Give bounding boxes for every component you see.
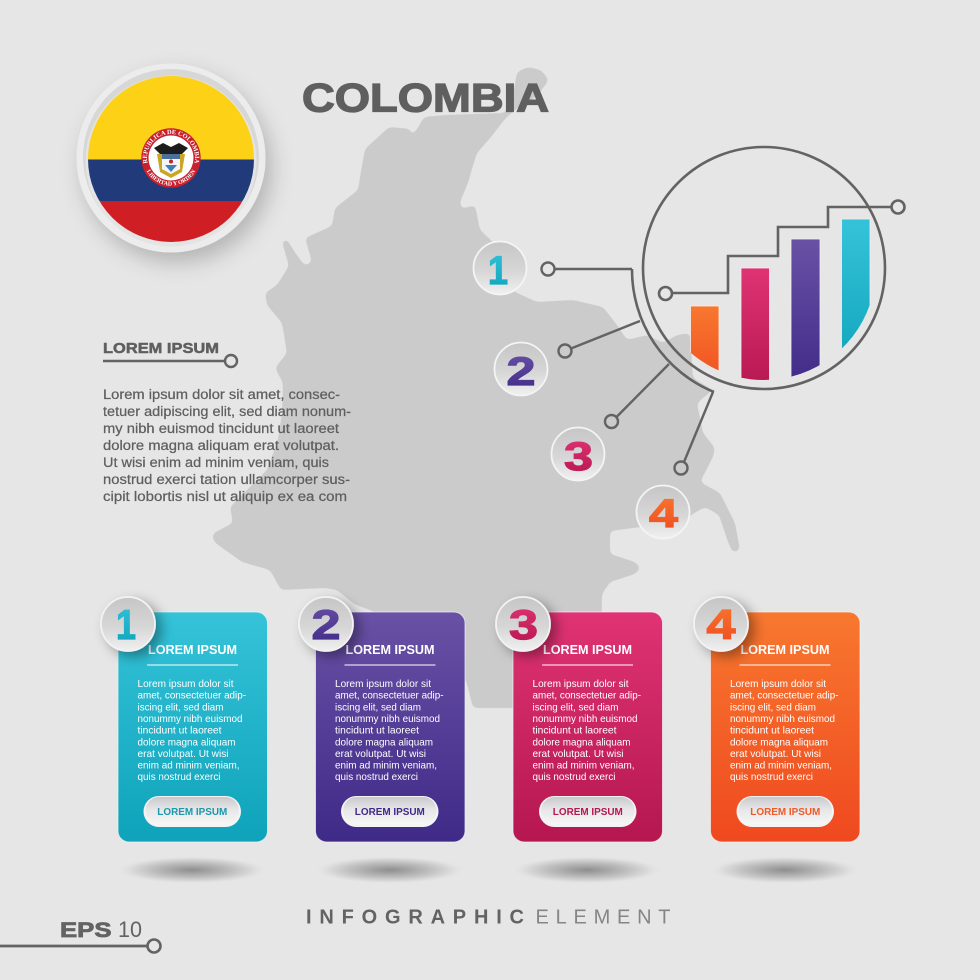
side heading: LOREM IPSUM xyxy=(103,341,219,357)
card 2 body text: dolore magna aliquam xyxy=(335,737,433,748)
card 4 body text: enim ad minim veniam, xyxy=(730,761,832,772)
card 2 body text: iscing elit, sed diam xyxy=(335,702,421,713)
card 4 body text: nonummy nibh euismod xyxy=(730,714,835,725)
card 1 body text: enim ad minim veniam, xyxy=(138,761,240,772)
card 3 body text: dolore magna aliquam xyxy=(532,737,630,748)
card 2 body text: quis nostrud exerci xyxy=(335,772,418,783)
side text block: nostrud exerci tation ullamcorper sus- xyxy=(103,472,350,488)
card 4 body text: tincidunt ut laoreet xyxy=(730,726,814,737)
side text block: tetuer adipiscing elit, sed diam nonum- xyxy=(103,404,351,420)
card 3 button xyxy=(539,796,636,827)
connector 4 xyxy=(674,392,713,474)
map badge 2: 2 xyxy=(506,350,536,394)
panel: card 2: LOREM IPSUM xyxy=(346,642,434,657)
card 1 body text: amet, consectetuer adip- xyxy=(138,691,246,702)
card 3 body text: iscing elit, sed diam xyxy=(532,702,618,713)
footer label: EPS 10 xyxy=(0,917,160,952)
panel: card 4 xyxy=(694,597,860,842)
floor shadow 3 xyxy=(511,856,663,884)
title: COLOMBIA xyxy=(302,76,549,120)
card 2 button xyxy=(341,796,438,827)
side text block xyxy=(103,387,351,505)
coat of arms seal xyxy=(141,128,201,188)
footer label: EPS 10: EPS xyxy=(60,918,112,942)
card 2 body text: erat volutpat. Ut wisi xyxy=(335,749,426,760)
card 3 number badge: 3 xyxy=(509,601,538,648)
side text block: my nibh euismod tincidunt ut laoreet xyxy=(103,421,339,437)
card 4 number badge: 4 xyxy=(706,601,736,648)
card 1 body text: dolore magna aliquam xyxy=(138,737,236,748)
card 3 body text: tincidunt ut laoreet xyxy=(532,726,617,737)
card 1 button: LOREM IPSUM xyxy=(157,807,227,818)
step line xyxy=(671,207,892,293)
side text block: Lorem ipsum dolor sit amet, consec- xyxy=(103,387,340,403)
card 3 body text: erat volutpat. Ut wisi xyxy=(532,749,624,760)
panel: card 3 xyxy=(496,597,662,842)
panel: card 4: LOREM IPSUM xyxy=(740,642,830,657)
map badge 4: 4 xyxy=(649,492,679,536)
flag badge xyxy=(73,64,281,272)
card 3 body text: Lorem ipsum dolor sit xyxy=(532,679,629,690)
card 1 body text: iscing elit, sed diam xyxy=(138,702,224,713)
card 2 number badge xyxy=(299,597,353,651)
panel: card 3: LOREM IPSUM xyxy=(543,642,632,657)
card 1 body text: quis nostrud exerci xyxy=(138,772,220,783)
card 1 body text: erat volutpat. Ut wisi xyxy=(138,749,228,760)
card 4 body text xyxy=(730,679,838,783)
footer label: infographic element: ELEMENT xyxy=(536,906,670,928)
card 2 body text: amet, consectetuer adip- xyxy=(335,691,444,702)
connector 3 xyxy=(605,364,669,428)
side text block: Ut wisi enim ad minim veniam, quis xyxy=(103,455,329,471)
card 3 button: LOREM IPSUM xyxy=(553,807,623,818)
floor shadow 2 xyxy=(314,856,466,884)
map of Colombia xyxy=(212,67,740,708)
card 4 body text: Lorem ipsum dolor sit xyxy=(730,679,826,690)
lens ring xyxy=(643,147,885,389)
floor shadow 1 xyxy=(116,856,268,884)
panel: card 1: LOREM IPSUM xyxy=(148,642,237,657)
map badge 4 xyxy=(636,486,690,538)
map badge 2 xyxy=(494,342,548,396)
card 3 body text xyxy=(532,679,641,783)
card 4 body text: iscing elit, sed diam xyxy=(730,702,816,713)
card 3 number badge xyxy=(496,597,550,651)
card 4 body text: amet, consectetuer adip- xyxy=(730,691,838,702)
card 4 body text: erat volutpat. Ut wisi xyxy=(730,749,821,760)
map badge 3: 3 xyxy=(564,435,593,479)
card 2 button: LOREM IPSUM xyxy=(355,807,425,818)
card 1 number badge: 1 xyxy=(116,601,136,648)
card 1 body text: nonummy nibh euismod xyxy=(138,714,243,725)
outer arc xyxy=(632,269,714,392)
map badge 1 xyxy=(474,242,526,294)
bar chart xyxy=(690,219,870,396)
side text block: dolore magna aliquam erat volutpat. xyxy=(103,438,339,454)
map badge 3 xyxy=(552,428,604,480)
card 2 number badge: 2 xyxy=(312,601,340,648)
card 4 body text: dolore magna aliquam xyxy=(730,737,828,748)
connector 2 xyxy=(558,321,640,358)
side heading xyxy=(103,341,237,367)
card 3 body text: quis nostrud exerci xyxy=(532,772,616,783)
card 2 body text: Lorem ipsum dolor sit xyxy=(335,679,431,690)
footer label: EPS 10: 10 xyxy=(118,917,142,942)
card 1 body text xyxy=(138,679,246,783)
card 4 button: LOREM IPSUM xyxy=(750,807,820,818)
card 2 body text xyxy=(335,679,444,783)
card 1 number badge xyxy=(101,597,155,651)
card 4 body text: quis nostrud exerci xyxy=(730,772,813,783)
card 3 body text: amet, consectetuer adip- xyxy=(532,691,641,702)
card 1 body text: tincidunt ut laoreet xyxy=(138,726,222,737)
footer label: infographic element xyxy=(306,906,670,928)
connector 1 xyxy=(542,262,632,276)
card 2 body text: tincidunt ut laoreet xyxy=(335,726,419,737)
card 4 number badge xyxy=(694,597,748,651)
card 2 body text: enim ad minim veniam, xyxy=(335,761,437,772)
map badge 1: 1 xyxy=(488,249,508,293)
panel: card 1 xyxy=(101,597,268,842)
floor shadow 4 xyxy=(709,856,861,884)
coat of arms seal: LIBERTAD Y ORDEN xyxy=(146,169,196,186)
flag stripes xyxy=(85,70,257,246)
card 4 button xyxy=(736,796,834,827)
panel: card 2 xyxy=(299,597,465,842)
card 3 body text: enim ad minim veniam, xyxy=(532,761,634,772)
coat of arms seal: REPUBLICA DE COLOMBIA xyxy=(142,130,200,164)
card 3 body text: nonummy nibh euismod xyxy=(532,714,638,725)
card 2 body text: nonummy nibh euismod xyxy=(335,714,440,725)
card 1 button xyxy=(144,796,241,827)
magnifier chart xyxy=(632,147,904,396)
footer label: infographic element: INFOGRAPHIC xyxy=(306,906,524,928)
side text block: cipit lobortis nisl ut aliquip ex ea com xyxy=(103,489,347,505)
card 1 body text: Lorem ipsum dolor sit xyxy=(138,679,234,690)
